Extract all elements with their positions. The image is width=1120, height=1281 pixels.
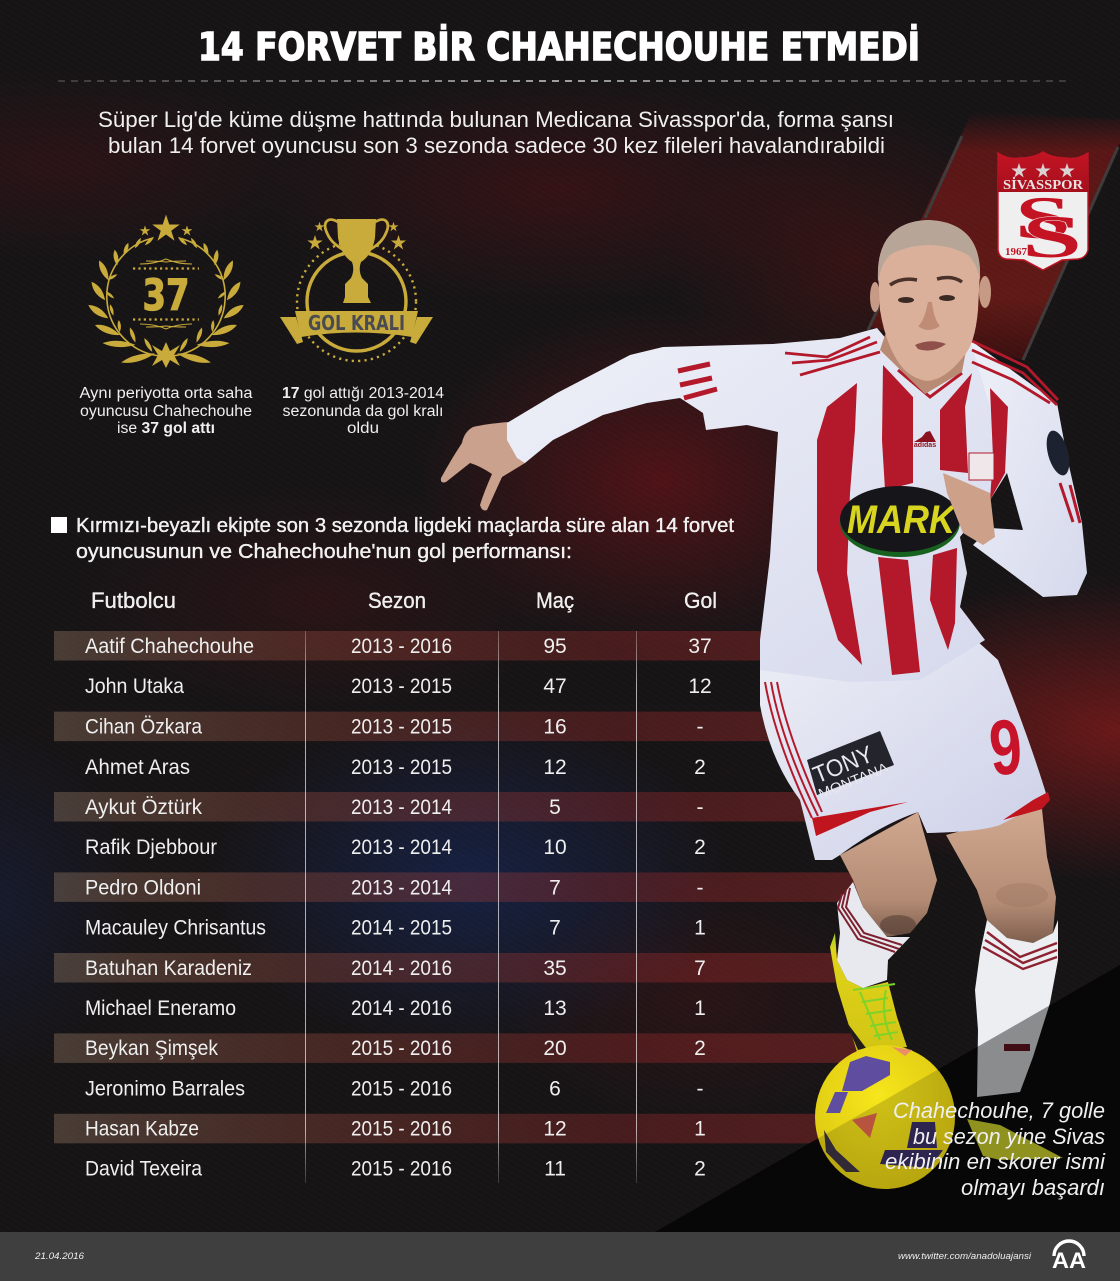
player names: Beykan Şimşek <box>85 1037 218 1060</box>
dark corner triangle over player <box>655 965 1120 1232</box>
matches: 11 <box>544 1158 566 1180</box>
matches: 35 <box>543 957 567 980</box>
goals: 2 <box>694 1037 706 1060</box>
adidas mark: adidas <box>914 442 936 449</box>
callout: top scorer <box>885 1098 1106 1200</box>
callout: top scorer: bu sezon yine Sivas <box>913 1124 1105 1149</box>
club crest: Sivasspor <box>998 152 1088 270</box>
seasons <box>351 635 452 1180</box>
right boot <box>967 1119 1063 1160</box>
icon: AA logo: AA <box>1052 1248 1086 1273</box>
matches: 95 <box>543 635 567 658</box>
right leg <box>946 809 1056 943</box>
goals: 1 <box>694 916 706 940</box>
footer bar: 21.04.2016 <box>34 1251 85 1262</box>
matches: 13 <box>543 997 567 1020</box>
goals <box>688 635 712 1180</box>
intro text: Süper Lig'de küme düşme hattında bulunan Medicana Sivasspor'da, forma şansı <box>98 107 894 132</box>
goals: 2 <box>694 756 706 779</box>
seasons: 2013 - 2014 <box>351 836 452 859</box>
dark corner triangle base <box>655 965 1120 1232</box>
seasons: 2013 - 2014 <box>351 876 452 900</box>
icon: laurel wreath with 37 <box>86 214 246 368</box>
seasons: 2015 - 2016 <box>351 1078 452 1100</box>
matches: 5 <box>549 796 561 819</box>
front hand <box>943 473 995 545</box>
player names: Cihan Özkara <box>85 716 202 738</box>
sponsor patch <box>840 486 960 557</box>
goals: 1 <box>694 997 706 1020</box>
goals: - <box>696 876 704 900</box>
intro text <box>98 107 894 158</box>
seasons: 2014 - 2016 <box>351 997 452 1020</box>
goals: - <box>696 796 704 819</box>
table header: Gol <box>684 588 717 613</box>
section heading: oyuncusunun ve Chahechouhe'nun gol performansı: <box>76 541 572 563</box>
caption: 37 goals <box>80 385 253 437</box>
section heading: Kırmızı-beyazlı ekipte son 3 sezonda ligdeki maçlarda süre alan 14 forvet <box>76 515 734 537</box>
section heading <box>51 515 734 563</box>
club crest: Sivasspor: 1967 <box>1005 246 1028 258</box>
club crest: Sivasspor: SİVASSPOR <box>1003 177 1083 192</box>
club crest: Sivasspor: S <box>1022 204 1082 270</box>
player names: Aatif Chahechouhe <box>85 635 254 658</box>
sponsor patch: MARK <box>847 498 958 542</box>
player names: David Texeira <box>85 1158 202 1180</box>
player names: Michael Eneramo <box>85 997 236 1020</box>
goals: 7 <box>694 957 706 980</box>
jersey crest <box>969 453 994 480</box>
shoulder and sleeve stripes <box>678 337 1080 523</box>
title: 14 FORVET BİR CHAHECHOUHE ETMEDİ <box>198 25 920 69</box>
seasons: 2014 - 2015 <box>351 916 452 940</box>
alternating row bands <box>54 631 860 1143</box>
table: player goal performance <box>54 588 860 1183</box>
footer bar: www.twitter.com/anadoluajansi <box>898 1251 1032 1262</box>
goals: 2 <box>694 836 706 859</box>
player names: Jeronimo Barrales <box>85 1078 245 1100</box>
matches: 47 <box>543 675 567 698</box>
player names: Pedro Oldoni <box>85 876 201 900</box>
seasons: 2013 - 2016 <box>351 635 452 658</box>
goals: - <box>696 716 704 738</box>
matches: 12 <box>543 1118 567 1140</box>
goals: 37 <box>688 635 712 658</box>
seasons: 2013 - 2015 <box>351 675 452 698</box>
icon: gol krali trophy badge <box>280 219 433 361</box>
ball <box>815 1045 955 1189</box>
caption: 37 goals: oyuncusu Chahechouhe <box>80 403 252 420</box>
jersey stripes <box>817 365 1008 675</box>
player names: Rafik Djebbour <box>85 836 217 859</box>
callout: top scorer: olmayı başardı <box>961 1175 1105 1200</box>
sleeve badge <box>1042 428 1074 478</box>
table header: Futbolcu <box>91 588 176 613</box>
footer bar <box>0 1232 1120 1281</box>
caption: 37 goals: ise 37 gol attı <box>117 420 215 437</box>
player names: Ahmet Aras <box>85 756 190 779</box>
head <box>870 220 991 381</box>
icon: laurel wreath with 37: 37 <box>142 271 190 321</box>
caption: gol krali: sezonunda da gol kralı <box>282 403 444 420</box>
seasons: 2015 - 2016 <box>351 1158 452 1180</box>
matches: 10 <box>543 836 567 859</box>
matches: 16 <box>543 716 567 738</box>
player names <box>85 635 266 1180</box>
club crest: Sivasspor: S <box>1015 185 1071 251</box>
caption: gol krali: oldu <box>347 420 379 437</box>
matches: 7 <box>549 876 561 900</box>
matches: 12 <box>543 756 567 779</box>
table header <box>91 588 717 613</box>
table header: Maç <box>536 588 574 613</box>
player names: Aykut Öztürk <box>85 796 202 819</box>
shorts: MONTANA <box>816 759 891 802</box>
shorts <box>760 630 1050 860</box>
shorts: TONY <box>809 741 877 789</box>
goals: - <box>696 1078 704 1100</box>
player names: John Utaka <box>85 675 184 698</box>
seasons: 2013 - 2014 <box>351 796 452 819</box>
seasons: 2015 - 2016 <box>351 1037 452 1060</box>
caption: gol krali: 17 gol attığı 2013-2014 <box>282 385 444 402</box>
icon: gol krali trophy badge: GOL KRALI <box>308 311 405 335</box>
player illustration <box>441 220 1087 1097</box>
goals: 12 <box>688 675 712 698</box>
matches: 20 <box>543 1037 567 1060</box>
intro text: bulan 14 forvet oyuncusu son 3 sezonda sadece 30 kez fileleri havalandırabildi <box>108 133 885 158</box>
seasons: 2013 - 2015 <box>351 716 452 738</box>
caption: gol krali <box>282 385 444 437</box>
right sock <box>975 920 1058 1097</box>
caption: 37 goals: Aynı periyotta orta saha <box>80 385 253 402</box>
left leg <box>840 812 937 937</box>
seasons: 2015 - 2016 <box>351 1118 452 1140</box>
matches: 6 <box>549 1078 561 1100</box>
callout: top scorer: Chahechouhe, 7 golle <box>893 1098 1105 1123</box>
player names: Hasan Kabze <box>85 1118 199 1140</box>
adidas mark <box>914 431 936 449</box>
jersey <box>507 328 1087 682</box>
matches: 7 <box>549 916 561 940</box>
player names: Macauley Chrisantus <box>85 916 266 940</box>
goals: 2 <box>694 1158 706 1180</box>
callout: top scorer: ekibinin en skorer ismi <box>885 1149 1106 1174</box>
rear hand <box>441 422 525 510</box>
table header: Sezon <box>368 588 426 613</box>
seasons: 2013 - 2015 <box>351 756 452 779</box>
left boot <box>830 933 907 1052</box>
left sock <box>837 882 910 988</box>
matches <box>543 635 567 1180</box>
goals: 1 <box>694 1118 706 1140</box>
player names: Batuhan Karadeniz <box>85 957 252 980</box>
shorts: 9 <box>986 702 1025 792</box>
seasons: 2014 - 2016 <box>351 957 452 980</box>
neck <box>880 320 968 394</box>
